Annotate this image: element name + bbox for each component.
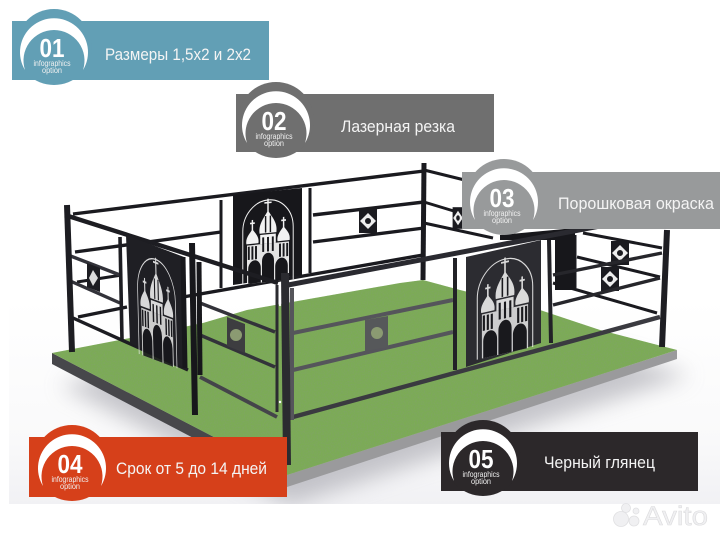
artificial grass — [52, 280, 677, 475]
front grey ornament — [365, 316, 388, 351]
back rails — [73, 171, 424, 317]
badge 05: option — [471, 477, 491, 486]
badge 04 — [29, 425, 287, 501]
platform shadow — [60, 350, 690, 505]
hidden far panel — [500, 228, 575, 290]
left church panel — [126, 235, 186, 368]
back post — [423, 163, 424, 280]
platform base — [52, 350, 677, 487]
floor — [9, 300, 720, 504]
badge 03: infographics — [484, 209, 520, 218]
badge 03: Порошковая окраска — [558, 194, 715, 213]
badge 05 — [441, 420, 698, 496]
badge 04: infographics — [52, 475, 88, 484]
right corner post — [662, 230, 667, 347]
badge 04: Срок от 5 до 14 дней — [116, 459, 267, 478]
badge 05: 05 — [468, 444, 494, 474]
left ornament — [87, 263, 100, 292]
badge 05: infographics — [462, 470, 500, 479]
badge 05: Черный глянец — [544, 453, 655, 472]
badge 02: option — [264, 139, 284, 148]
badge 02: Лазерная резка — [341, 117, 455, 136]
badge 03: 03 — [490, 183, 514, 213]
back church panel — [233, 188, 302, 285]
right side rails — [424, 170, 662, 313]
badge 01: infographics — [34, 59, 70, 68]
left side fence — [65, 205, 278, 417]
badge 04: option — [60, 482, 80, 491]
Avito watermark: Avito — [643, 501, 708, 531]
badge 01: 01 — [40, 33, 64, 63]
front corner post — [277, 273, 292, 465]
badge 01: option — [42, 66, 62, 75]
gate post — [192, 243, 200, 415]
badge 04: 04 — [58, 449, 83, 479]
right-front side rails — [288, 226, 662, 417]
badge 03: option — [492, 216, 512, 225]
left corner post — [67, 205, 72, 352]
badge 03 — [462, 159, 720, 235]
Avito watermark — [614, 501, 708, 531]
badge 02: infographics — [256, 132, 292, 141]
badge 02 — [236, 82, 494, 158]
left rails — [65, 215, 278, 283]
badge 01: Размеры 1,5х2 и 2х2 — [105, 45, 251, 64]
right front church panel — [466, 240, 541, 367]
back left panel rails — [77, 188, 310, 288]
badge 01 — [12, 9, 269, 85]
badge 02: 02 — [262, 106, 286, 136]
back fence — [73, 163, 662, 317]
grey ornament on left side — [227, 317, 245, 353]
back ornaments — [359, 207, 629, 291]
